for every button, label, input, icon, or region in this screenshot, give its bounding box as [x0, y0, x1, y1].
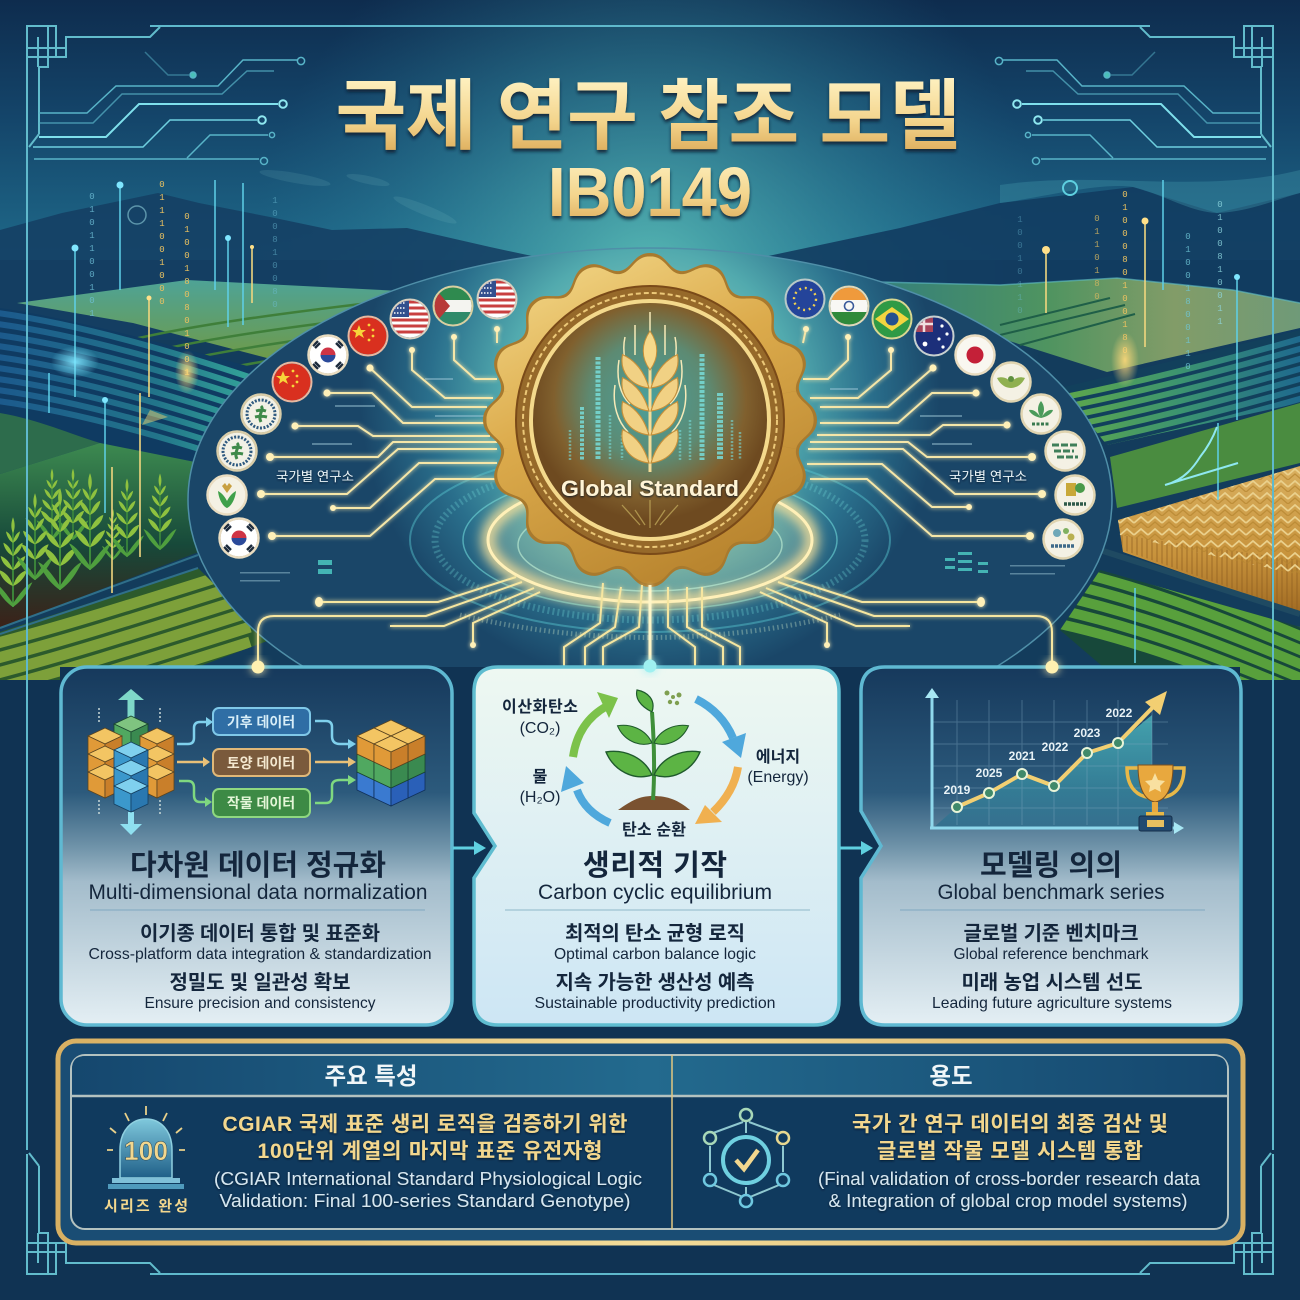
flag: Japan: [956, 336, 994, 374]
data type boxes: [213, 708, 310, 817]
line chart: 2019: [944, 783, 971, 797]
card top dots: [252, 660, 1058, 674]
data type boxes: 작물 데이터: [227, 795, 295, 811]
label: left national institutes: 국가별 연구소: [276, 469, 354, 484]
data streams and light beams: 01001800110: [1183, 232, 1193, 375]
title: 국제 연구 참조 모델: [336, 74, 960, 160]
left lower crop rows: [0, 554, 266, 680]
logo: green bars: [1046, 432, 1084, 470]
data streams and light beams: 10010110: [1015, 215, 1025, 319]
logo: gold and green: [1056, 476, 1094, 514]
point 2 english: Sustainable productivity prediction: [534, 995, 776, 1012]
gold medallion: [483, 253, 817, 587]
logo: blue and green flowers: [1044, 520, 1082, 558]
line chart: 2022: [1106, 706, 1133, 720]
data streams and light beams: 100810080: [270, 196, 280, 313]
flag: USA 2: [477, 279, 517, 319]
point 2: 미래 농업 시스템 선도: [962, 971, 1142, 994]
key features text: (CGIAR International Standard Physiological Logic: [214, 1169, 642, 1189]
arrow: card 1 to card 2: [453, 841, 486, 855]
line chart: 2022: [1042, 740, 1069, 754]
logo: green wings: [992, 362, 1030, 402]
data type boxes: 토양 데이터: [227, 755, 295, 771]
point 1: 이기종 데이터 통합 및 표준화: [140, 922, 380, 945]
point 1 english: Optimal carbon balance logic: [554, 946, 756, 963]
cycle labels: 탄소 순환: [622, 821, 686, 839]
line chart: 2021: [1009, 749, 1036, 763]
card 2: carbon cycle: [474, 667, 839, 1025]
data streams and light beams: 0100810011: [1215, 200, 1225, 330]
scalloped rim: [483, 253, 817, 587]
data towers: [570, 354, 740, 460]
data flow arrows: [177, 717, 356, 807]
cycle labels: 이산화탄소: [502, 698, 578, 716]
flag: Palestine style: [433, 286, 473, 326]
cycle labels: [502, 698, 809, 839]
mountains: [0, 170, 1300, 340]
wheat emblem: [614, 312, 686, 472]
left green plot: [0, 413, 100, 474]
point 2: 정밀도 및 일관성 확보: [170, 971, 350, 994]
icon: series 100 beacon: 100: [124, 1136, 168, 1166]
flag: China: [272, 362, 312, 402]
decorative data marks: [240, 378, 1065, 582]
cycle labels: 물: [533, 769, 548, 786]
scalloped face: [486, 256, 814, 584]
english heading: Multi-dimensional data normalization: [88, 881, 428, 904]
header: applications: 용도: [929, 1063, 973, 1089]
heading: 모델링 의의: [980, 849, 1122, 882]
arrow: card 2 to card 3: [840, 841, 873, 855]
point 2: 지속 가능한 생산성 예측: [556, 971, 754, 994]
right crop rows: [1069, 336, 1300, 445]
decorative clouds: [259, 167, 458, 227]
point 1 english: Global reference benchmark: [954, 946, 1149, 963]
english heading: Carbon cyclic equilibrium: [538, 881, 772, 904]
connectors to cards: [258, 577, 1052, 668]
cycle labels: (Energy): [747, 769, 809, 786]
line chart: 2025: [976, 766, 1003, 780]
data streams and light beams: 0110180: [1092, 214, 1102, 305]
cycle arrows: [561, 692, 746, 824]
logo: institute seal: [217, 431, 257, 471]
trophy: [1127, 765, 1184, 831]
applications text: [818, 1113, 1201, 1211]
flag: Korea: [219, 518, 259, 558]
data streams and light beams: 0100080100180: [1120, 190, 1130, 359]
right lower crop rows: [1060, 548, 1300, 680]
left corn field: [0, 443, 230, 628]
point 1 english: Cross-platform data integration & standardization: [88, 946, 432, 963]
right top field: [880, 278, 1300, 372]
point 1: 최적의 탄소 균형 로직: [565, 922, 745, 945]
header: key features: 주요 특성: [324, 1063, 418, 1089]
left data cubes: [88, 689, 174, 835]
flag: Australia: [914, 316, 954, 356]
applications text: & Integration of global crop model systems): [828, 1191, 1188, 1211]
flag: Korea 2: [308, 335, 348, 375]
applications text: (Final validation of cross-border research data: [818, 1169, 1201, 1189]
point 1: 글로벌 기준 벤치마크: [964, 922, 1138, 945]
heading: 다차원 데이터 정규화: [130, 849, 386, 882]
data streams and light beams: 0111001000: [157, 180, 167, 310]
subtitle code: IB0149: [548, 153, 752, 231]
heading: 생리적 기작: [583, 849, 727, 882]
data streams and light beams: 0100180801001: [182, 212, 192, 381]
bottom summary panel: [58, 1041, 1243, 1243]
english heading: Global benchmark series: [938, 881, 1164, 904]
applications text: 국가 간 연구 데이터의 최종 검산 및: [852, 1113, 1168, 1136]
flag: China 2: [348, 316, 388, 356]
logo: green sprout: [1022, 394, 1060, 434]
lower background band: [0, 667, 1300, 1300]
cycle labels: 에너지: [756, 748, 800, 766]
flag: USA: [390, 299, 430, 339]
flag: EU: [785, 279, 825, 319]
flag: Brazil: [872, 299, 912, 339]
data streams and light beams: 0101100101: [87, 192, 97, 322]
left flags and institute seals: [208, 279, 517, 558]
cycle labels: (CO₂): [520, 720, 560, 737]
line chart: [925, 688, 1184, 834]
left top field: [17, 280, 495, 375]
key features text: [214, 1113, 642, 1211]
right wheat field: [1118, 466, 1300, 614]
left blue crop rows: [0, 310, 249, 451]
key features text: Validation: Final 100-series Standard Genotype): [220, 1191, 630, 1211]
applications text: 글로벌 작물 모델 시스템 통합: [877, 1140, 1143, 1163]
circuit lines: right research institutes: [803, 326, 1046, 540]
label: right national institutes: 국가별 연구소: [949, 469, 1027, 484]
icon: network check: [704, 1109, 789, 1207]
stacked result cube: [357, 720, 425, 806]
point 2 english: Ensure precision and consistency: [144, 995, 376, 1012]
right flags and institute logos: [785, 279, 1094, 558]
card 1: multidimensional data: [61, 667, 452, 1025]
logo: institute seal 2: [241, 394, 281, 434]
circuit lines: left research institutes: [257, 326, 500, 540]
background sky: [0, 0, 1300, 700]
key features text: CGIAR 국제 표준 생리 로직을 검증하기 위한: [222, 1113, 628, 1136]
logo: green plant: [208, 476, 246, 514]
card 3: global benchmark: [861, 667, 1241, 1025]
data streams and light beams: [49, 180, 1240, 663]
plant: [606, 690, 700, 810]
icon: series 100 beacon: [104, 1106, 188, 1215]
flag: India: [829, 286, 869, 326]
line chart: 2023: [1074, 726, 1101, 740]
point 2 english: Leading future agriculture systems: [932, 995, 1172, 1012]
key features text: 100단위 계열의 마지막 표준 유전자형: [258, 1140, 602, 1163]
central oval panel: [188, 248, 1112, 752]
cycle labels: (H₂O): [520, 789, 560, 806]
data type boxes: 기후 데이터: [227, 714, 295, 730]
medallion text: Global Standard: [561, 476, 739, 501]
radar rings under medallion: [410, 448, 890, 638]
right green plot: [1110, 403, 1300, 508]
icon: series 100 beacon: 시리즈 완성: [104, 1198, 188, 1215]
